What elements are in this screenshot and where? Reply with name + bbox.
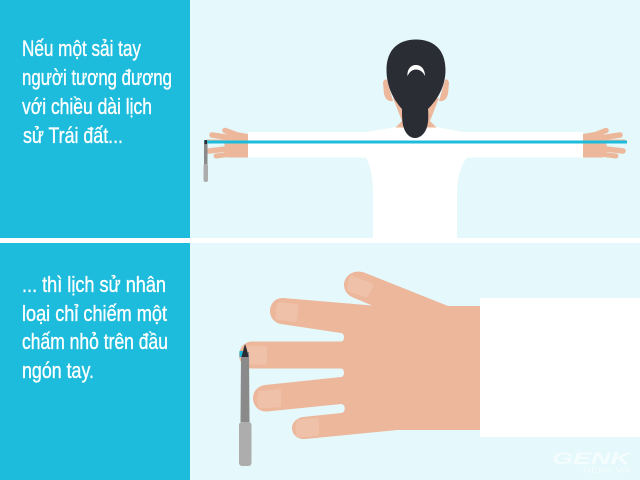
fingernails xyxy=(247,276,373,438)
text block: top caption: sử Trái đất... xyxy=(23,123,123,148)
watermark: GENK logo: GENK.VN xyxy=(583,468,630,474)
measuring line xyxy=(204,140,627,144)
text block: top caption: Nếu một sải tay xyxy=(22,36,141,61)
illustration: sleeve xyxy=(480,298,640,437)
text block: bottom caption: ngón tay. xyxy=(22,358,94,383)
text block: bottom caption: loại chỉ chiếm một xyxy=(22,301,167,326)
left hand xyxy=(208,130,248,158)
text block: bottom caption: chấm nhỏ trên đầu xyxy=(22,329,168,354)
panel: top background xyxy=(190,0,640,238)
text block: top caption: người tương đương xyxy=(22,65,172,90)
illustration: enlarged hand xyxy=(239,272,480,439)
pen and human-history dot xyxy=(239,344,252,466)
right hand xyxy=(583,130,624,158)
white shirt xyxy=(248,128,583,238)
illustration: person with outstretched arms xyxy=(204,40,627,238)
hair tie xyxy=(407,65,425,76)
text block: top caption xyxy=(22,36,172,148)
panel: top text background xyxy=(0,0,190,238)
text block: top caption: với chiều dài lịch xyxy=(22,94,152,119)
watermark: GENK logo xyxy=(552,449,633,474)
text block: bottom caption xyxy=(22,272,168,383)
neck and ears xyxy=(383,79,449,128)
pen marker xyxy=(204,140,208,182)
watermark: GENK logo: GENK xyxy=(552,449,633,468)
panel: bottom text background xyxy=(0,243,190,480)
text block: bottom caption: ... thì lịch sử nhân xyxy=(22,272,166,297)
panel: bottom background xyxy=(190,243,640,480)
hand shape with fingers xyxy=(239,272,480,439)
hair with ponytail xyxy=(386,40,446,138)
